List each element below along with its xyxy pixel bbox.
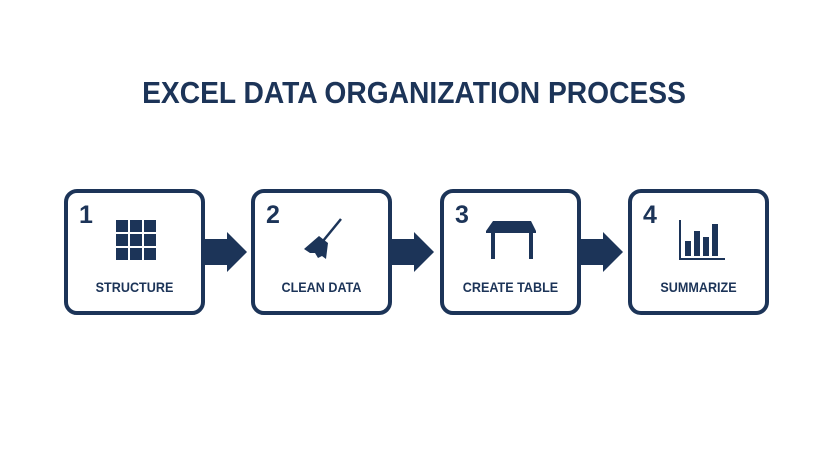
icon: table (486, 221, 536, 259)
step 1: structure (64, 189, 205, 315)
step 1: structure: STRUCTURE (96, 279, 173, 295)
arrow 3 (581, 232, 623, 272)
step 3: create table: 3 (455, 201, 469, 229)
arrow 1 (205, 232, 247, 272)
step 3: create table: CREATE TABLE (463, 279, 558, 295)
step 4: summarize: 4 (643, 201, 657, 229)
arrow 2 (392, 232, 434, 272)
step 4: summarize (628, 189, 769, 315)
icon: grid (116, 220, 156, 260)
step 2: clean data: 2 (266, 201, 280, 229)
step 1: structure: 1 (79, 201, 93, 229)
title: EXCEL DATA ORGANIZATION PROCESS (142, 75, 686, 110)
step 2: clean data: CLEAN DATA (281, 279, 362, 295)
icon: bar chart (679, 220, 725, 260)
step 4: summarize: SUMMARIZE (660, 279, 737, 295)
step 3: create table (440, 189, 581, 315)
step 2: clean data (251, 189, 392, 315)
icon: broom (304, 218, 342, 259)
